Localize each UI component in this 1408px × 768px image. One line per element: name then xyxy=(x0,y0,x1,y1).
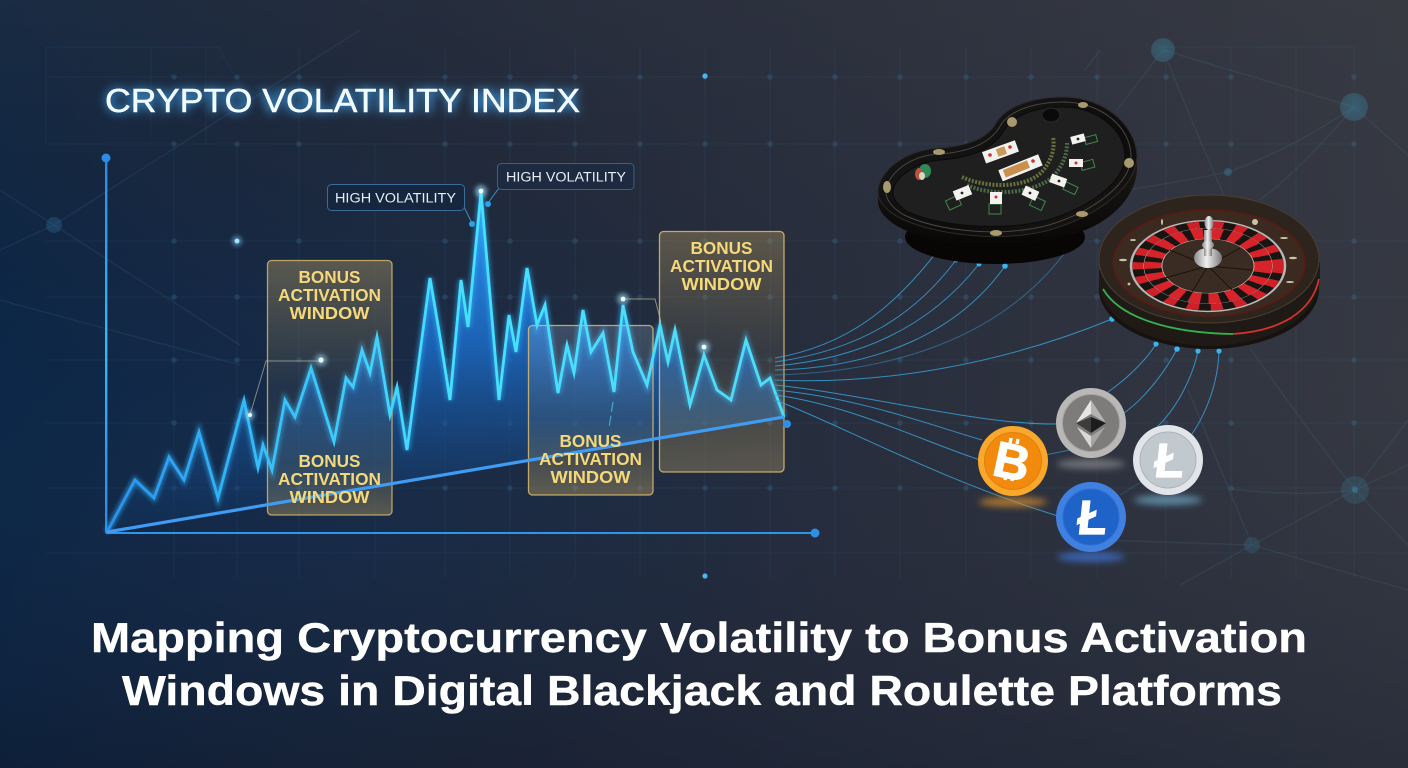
label: bonus text box 3: WINDOW xyxy=(682,274,762,294)
rim groove xyxy=(886,102,1131,232)
coin: ethereum xyxy=(1056,388,1126,469)
window: bonus activation box 2 xyxy=(528,326,653,495)
betting arcs xyxy=(962,137,1067,192)
table pedestal xyxy=(905,210,1085,264)
annotation leader lines and glowing points xyxy=(232,73,710,579)
bet squares xyxy=(945,135,1098,214)
chart axes xyxy=(102,154,820,538)
rim studs xyxy=(1119,219,1297,285)
label: bonus text box 2 xyxy=(539,431,642,487)
label: bonus text box 1 bottom xyxy=(278,451,381,507)
coin: silver litecoin xyxy=(1133,425,1203,505)
label: bonus text box 2: BONUS xyxy=(560,431,622,451)
label: bonus text box 1 bottom: BONUS xyxy=(298,451,360,471)
coin: bitcoin xyxy=(978,426,1048,507)
main headline: Windows in Digital Blackjack and Roulette Platforms xyxy=(122,667,1282,714)
chart title: CRYPTO VOLATILITY INDEX xyxy=(105,82,580,119)
background grid and network xyxy=(0,30,1408,590)
blackjack table xyxy=(878,97,1137,264)
callout: high volatility left: HIGH VOLATILITY xyxy=(335,190,456,206)
volatility chart xyxy=(102,73,820,579)
end point dot xyxy=(783,420,791,428)
connector endpoint dots xyxy=(934,250,1222,354)
main headline xyxy=(91,614,1307,714)
table side xyxy=(878,155,1137,245)
roulette wheel xyxy=(1099,195,1320,349)
trend line xyxy=(107,417,784,532)
dealer button xyxy=(1042,108,1060,122)
label: bonus text box 2: WINDOW xyxy=(550,467,631,487)
coin cluster xyxy=(978,388,1203,562)
volatility line glow xyxy=(107,192,784,532)
rim bumpers xyxy=(883,102,1134,236)
table felt xyxy=(893,107,1125,226)
main headline: Mapping Cryptocurrency Volatility to Bonus Activation xyxy=(91,614,1307,661)
center cone spokes xyxy=(1165,248,1252,292)
label: bonus text box 1 top xyxy=(278,267,381,323)
table rim xyxy=(878,97,1137,236)
label: bonus text box 1 bottom: ACTIVATION xyxy=(278,469,381,489)
coin: blue litecoin: Ł xyxy=(1075,491,1110,545)
wheel base xyxy=(1099,229,1319,349)
wheel top rim xyxy=(1099,195,1319,323)
label: bonus text box 1 top: BONUS xyxy=(298,267,360,287)
coin: blue litecoin xyxy=(1056,482,1126,562)
chip stack xyxy=(915,164,931,180)
number and pocket rings xyxy=(1131,221,1285,311)
window: bonus activation box 3 xyxy=(660,232,784,472)
center turret xyxy=(1194,216,1222,268)
label: bonus text box 1 top: WINDOW xyxy=(290,303,370,323)
label: bonus text box 3: ACTIVATION xyxy=(670,256,773,276)
wheel bowl xyxy=(1113,210,1305,316)
label: bonus text box 1 top: ACTIVATION xyxy=(278,285,381,305)
callout: high volatility right xyxy=(485,164,634,207)
label: bonus text box 3: BONUS xyxy=(690,238,752,258)
volatility line xyxy=(107,192,784,532)
LED strip red xyxy=(1233,279,1319,334)
callout: high volatility left xyxy=(328,184,475,227)
connector lines to tables and coins xyxy=(775,250,1219,516)
LED strip green xyxy=(1103,289,1233,334)
card faces xyxy=(961,138,1079,198)
playing cards xyxy=(953,133,1086,204)
label: bonus text box 2: ACTIVATION xyxy=(539,449,642,469)
coin: bitcoin: B xyxy=(988,431,1035,493)
label: bonus text box 3 xyxy=(670,238,773,294)
window: bonus activation box 1 xyxy=(268,260,392,515)
chart title: CRYPTO VOLATILITY INDEX xyxy=(105,82,580,119)
volatility area fill xyxy=(107,192,784,532)
callout: high volatility right: HIGH VOLATILITY xyxy=(506,170,626,184)
coin: silver litecoin: Ł xyxy=(1152,434,1187,488)
label: bonus text box 1 bottom: WINDOW xyxy=(290,487,370,507)
